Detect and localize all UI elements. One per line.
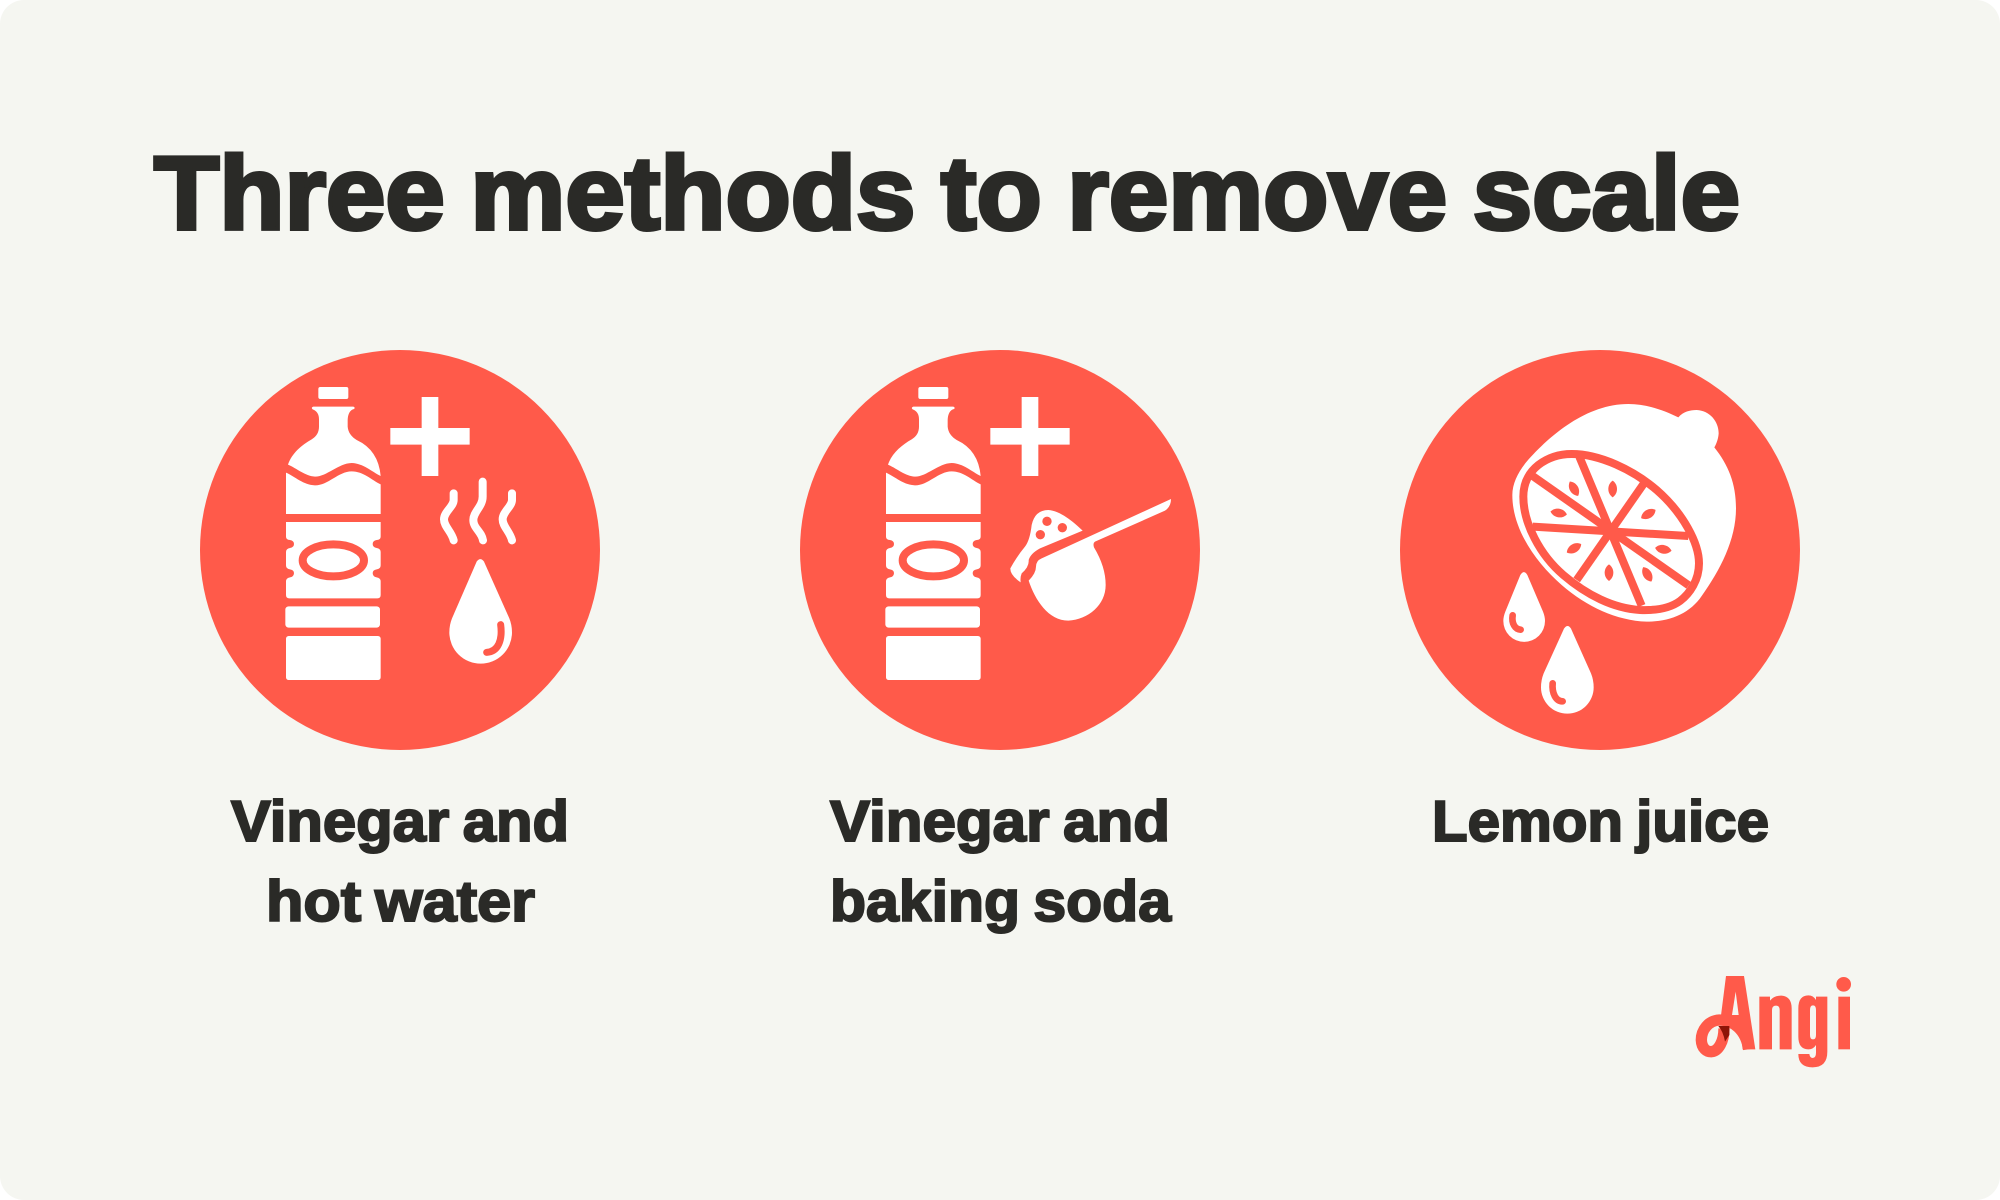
label: vinegar and hot water bbox=[231, 790, 569, 934]
icon: vinegar bottle bbox=[885, 387, 981, 680]
panel: vinegar and hot water bbox=[200, 350, 600, 934]
label: vinegar and baking soda: baking soda bbox=[830, 870, 1172, 934]
icon: steam bbox=[444, 482, 512, 540]
icon circle: vinegar and hot water bbox=[200, 350, 600, 750]
icon: plus sign bbox=[390, 397, 470, 476]
icon: baking soda scoop bbox=[1010, 499, 1171, 621]
icon: large juice drop bbox=[1541, 626, 1594, 714]
label: vinegar and baking soda bbox=[830, 790, 1172, 934]
icon: vinegar bottle bbox=[285, 387, 381, 680]
icon: water drop bbox=[449, 559, 512, 664]
icon circle: lemon juice bbox=[1400, 350, 1800, 750]
label: vinegar and hot water: hot water bbox=[266, 870, 535, 934]
title: Three methods to remove scale bbox=[154, 136, 1740, 252]
label: vinegar and baking soda: Vinegar and bbox=[830, 790, 1170, 854]
icon circle: vinegar and baking soda bbox=[800, 350, 1200, 750]
icon: small juice drop bbox=[1503, 572, 1545, 642]
panel: vinegar and baking soda bbox=[800, 350, 1200, 934]
label: lemon juice: Lemon juice bbox=[1432, 790, 1769, 854]
icon: plus sign bbox=[990, 397, 1070, 476]
label: vinegar and hot water: Vinegar and bbox=[231, 790, 569, 854]
icon: cut lemon bbox=[1512, 404, 1736, 622]
panel: lemon juice bbox=[1400, 350, 1800, 854]
logo: Angi bbox=[1701, 976, 1851, 1067]
